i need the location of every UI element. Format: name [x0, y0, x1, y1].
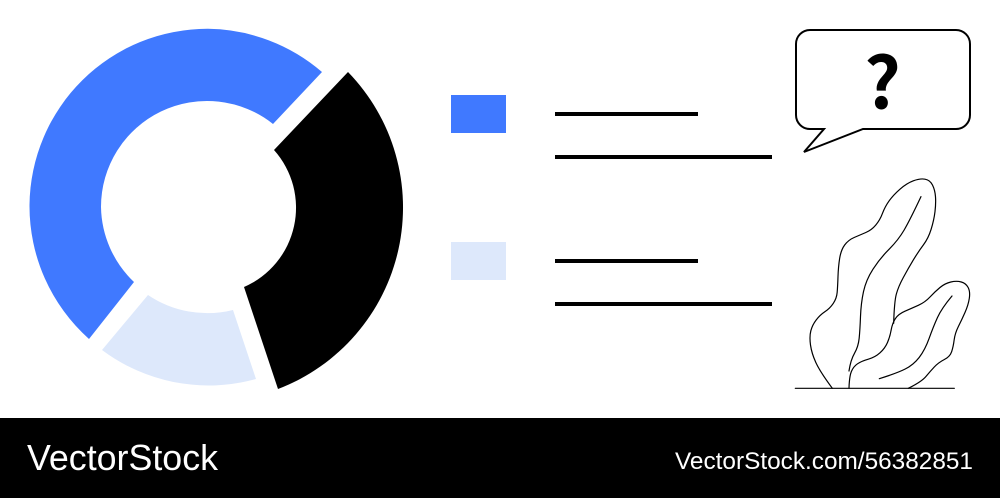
donut segment: blue: [29, 29, 322, 339]
legend line: long: [555, 155, 772, 159]
legend swatch: blue: [451, 95, 506, 133]
footer logo text: VectorStock: [27, 437, 219, 478]
tall leaf outline: [810, 179, 936, 388]
footer bar: [0, 418, 1000, 498]
legend line: short: [555, 259, 698, 263]
icon: plant with leaves: [795, 179, 970, 388]
icon: speech bubble with question mark: [796, 28, 970, 152]
donut chart: [29, 29, 403, 389]
legend item: pale blue: [451, 242, 772, 306]
footer image id text: VectorStock.com/56382851: [675, 448, 973, 475]
speech bubble outline: [796, 30, 970, 152]
small leaf vein: [879, 296, 952, 379]
legend line: long: [555, 302, 772, 306]
small leaf outline: [849, 281, 970, 388]
donut segment: pale blue: [102, 295, 256, 385]
legend line: short: [555, 112, 698, 116]
donut segment: black: [244, 72, 403, 389]
legend item: blue: [451, 95, 772, 159]
ground line: [795, 387, 954, 390]
tall leaf vein: [849, 197, 921, 371]
legend swatch: pale blue: [451, 242, 506, 280]
question mark: ?: [864, 28, 901, 130]
